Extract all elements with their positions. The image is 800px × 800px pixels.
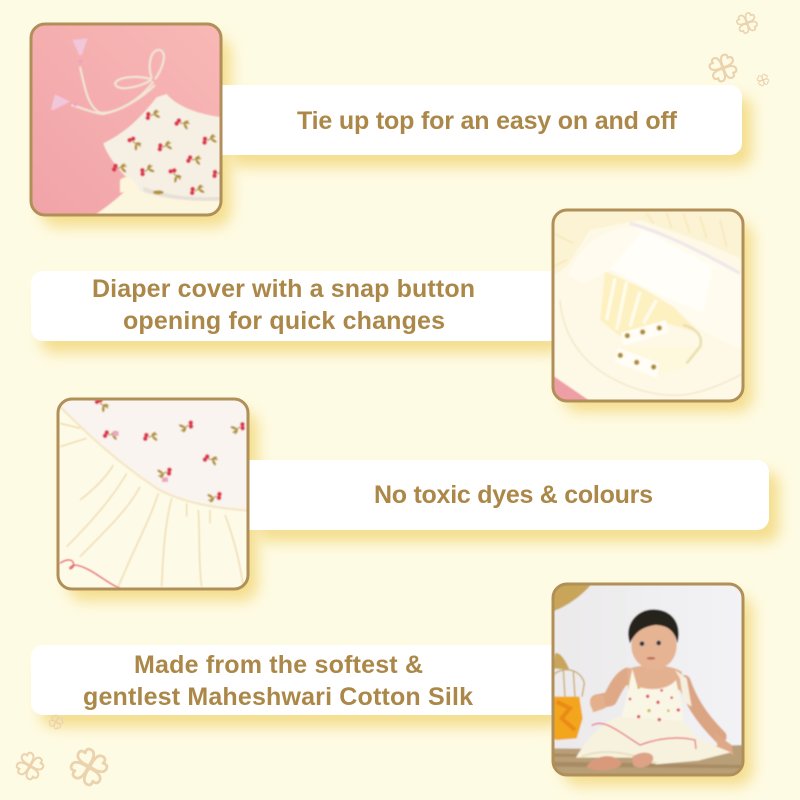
text pill 3 — [247, 460, 769, 530]
feature row 4: Maheshwari cotton silk — [31, 582, 753, 786]
text pill 3: No toxic dyes & colours — [374, 481, 653, 509]
text pill 2 — [31, 271, 553, 341]
text pill 1 — [220, 85, 742, 155]
text pill 4: Made from the softest & — [134, 651, 423, 679]
chest — [627, 665, 683, 690]
dress bodice — [622, 669, 683, 720]
photo: dress tie-up top on pink — [28, 22, 227, 218]
feature row 3: no toxic dyes — [55, 395, 779, 601]
cage — [553, 670, 584, 697]
text pill 2: Diaper cover with a snap button — [92, 275, 475, 303]
photo: embroidered fabric close-up — [55, 395, 252, 592]
feature row 1: tie up top — [28, 22, 752, 227]
text pill 4: gentlest Maheshwari Cotton Silk — [83, 683, 473, 711]
feet and hand — [587, 756, 622, 770]
decorative flowers top right — [705, 10, 771, 88]
head — [631, 622, 677, 670]
photo: snap button diaper cover — [550, 207, 747, 403]
dress skirt — [576, 717, 731, 764]
feature row 2: diaper cover — [31, 207, 753, 412]
text pill 2: opening for quick changes — [123, 307, 445, 335]
photo: baby sitting in dress — [550, 582, 747, 778]
baby arms — [597, 675, 627, 702]
text pill 4 — [31, 645, 553, 715]
text pill 1: Tie up top for an easy on and off — [297, 107, 678, 135]
decorative flowers bottom left — [14, 714, 110, 788]
